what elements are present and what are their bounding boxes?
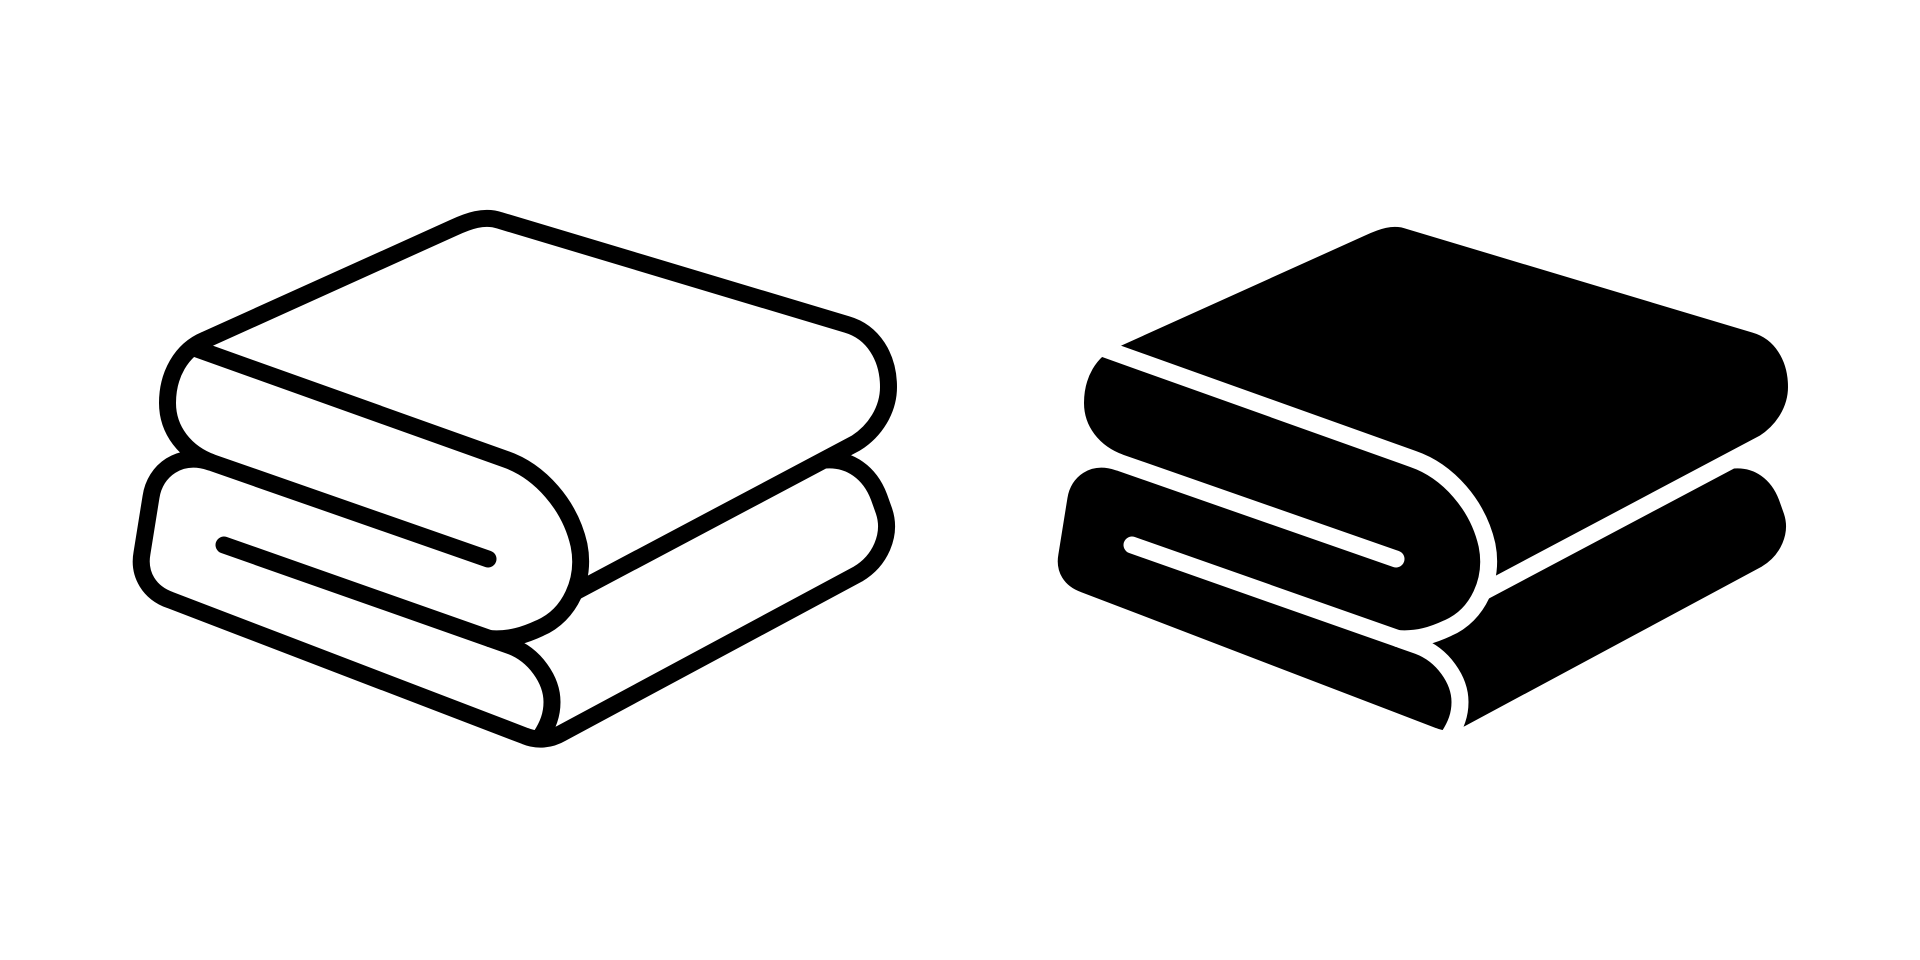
bottom towel inner fold [224,545,552,736]
bottom towel outer contour [141,459,886,739]
solid silhouette [1049,218,1796,739]
top towel outer contour with inner fold line [168,218,888,592]
white separating lines [1049,218,1796,739]
icon: outline folded towels [141,218,889,739]
top towel rolled fold [197,349,581,639]
icon: solid folded towels [1049,218,1796,739]
